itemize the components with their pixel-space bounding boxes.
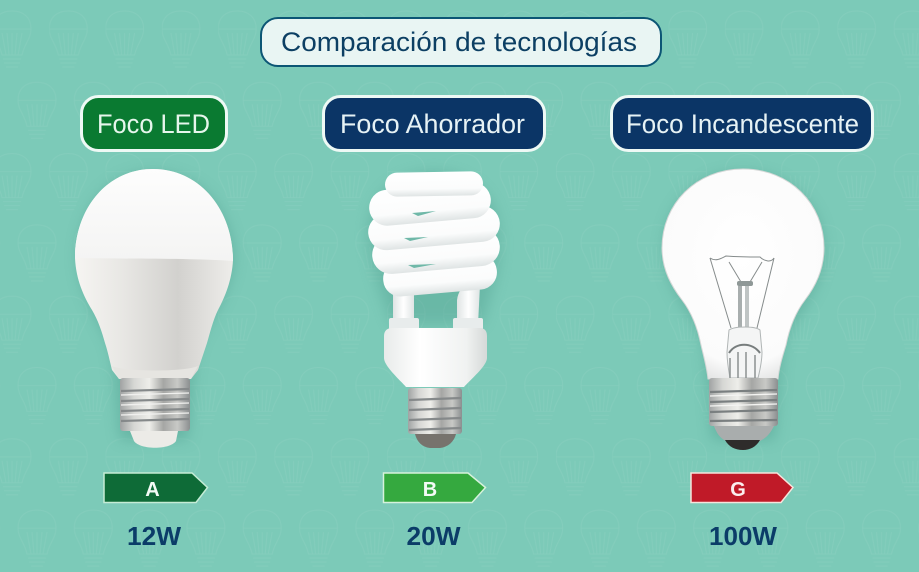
heading: Foco Incandescente: Foco Incandescente bbox=[626, 109, 859, 139]
energy label B: B bbox=[423, 479, 437, 501]
energy label A bbox=[104, 473, 208, 502]
icon: incandescent bulb bbox=[662, 169, 824, 450]
heading: Foco Ahorrador: Foco Ahorrador bbox=[340, 109, 525, 139]
wattage: 100W: 100W bbox=[709, 521, 777, 551]
heading: Foco LED bbox=[82, 96, 226, 150]
title bbox=[261, 18, 661, 66]
heading: Foco Incandescente bbox=[612, 96, 872, 150]
wattage: 12W: 12W bbox=[127, 521, 181, 551]
energy label G bbox=[691, 473, 793, 502]
energy label A: A bbox=[145, 479, 160, 501]
filament support wires bbox=[710, 256, 774, 328]
heading: Foco Ahorrador bbox=[324, 96, 544, 150]
heading: Foco LED: Foco LED bbox=[97, 109, 210, 139]
energy label B bbox=[384, 473, 486, 502]
icon: compact fluorescent bulb bbox=[367, 171, 501, 448]
icon: LED bulb bbox=[75, 169, 234, 448]
wattage: 20W: 20W bbox=[406, 521, 461, 551]
title: Comparación de tecnologías bbox=[281, 27, 637, 57]
energy label G: G bbox=[730, 479, 746, 501]
